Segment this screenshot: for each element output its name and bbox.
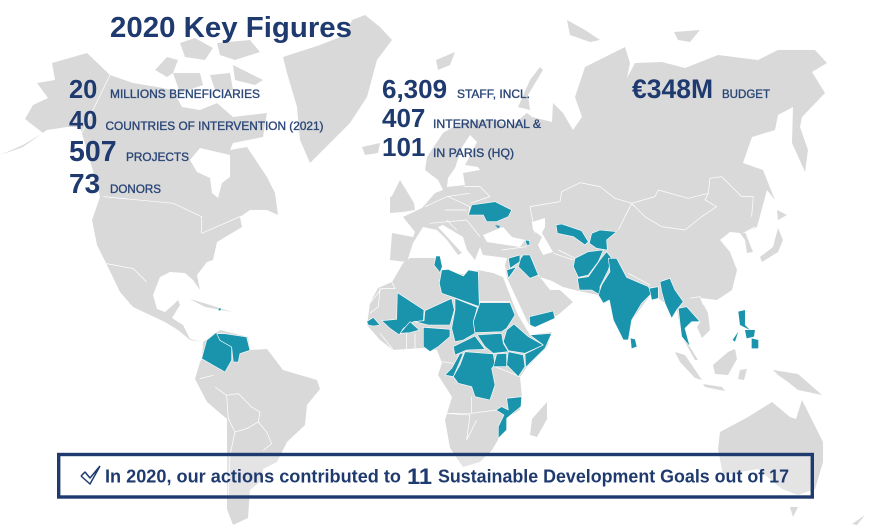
callout: sustainable development goals: Sustainable Development Goals out of 17 <box>438 467 789 487</box>
key figures: left column <box>69 76 324 199</box>
figure: projects: PROJECTS <box>126 150 189 164</box>
Colombia, Venezuela, Haiti <box>202 308 250 372</box>
highlighted countries <box>202 202 758 438</box>
country borders <box>80 75 755 495</box>
figure: projects <box>69 136 189 168</box>
title: 2020 Key Figures <box>110 12 352 44</box>
figure: budget <box>632 74 771 104</box>
figure: Paris staff: 101 <box>382 132 425 162</box>
figure: beneficiaries <box>69 76 260 104</box>
figure: countries: 40 <box>69 107 97 135</box>
figure: staff <box>382 74 530 104</box>
key figures: staff column <box>382 74 541 162</box>
figure: beneficiaries: 20 <box>69 76 97 104</box>
Ukraine <box>468 202 512 228</box>
callout: sustainable development goals <box>59 454 812 497</box>
Africa and Levant <box>367 255 555 438</box>
figure: countries: COUNTRIES OF INTERVENTION (2021) <box>106 119 324 133</box>
figure: Paris staff <box>382 132 514 162</box>
callout: sustainable development goals: 11 <box>407 464 432 489</box>
figure: donors: DONORS <box>110 182 161 196</box>
figure: projects: 507 <box>69 136 117 168</box>
figure: donors <box>69 168 161 199</box>
figure: staff: 6,309 <box>382 74 447 104</box>
figure: staff: STAFF, INCL. <box>457 87 530 101</box>
figure: budget: €348M <box>632 74 713 104</box>
figure: Paris staff: IN PARIS (HQ) <box>433 146 514 160</box>
Central and South Asia, Southeast Asia <box>525 224 758 348</box>
figure: international staff <box>382 103 541 133</box>
figure: beneficiaries: MILLIONS BENEFICIARIES <box>110 87 260 101</box>
figure: international staff: 407 <box>382 103 425 133</box>
icon: check mark <box>81 466 100 484</box>
inland seas <box>190 135 553 255</box>
figure: international staff: INTERNATIONAL & <box>433 117 541 131</box>
figure: budget: BUDGET <box>722 87 771 101</box>
figure: countries <box>69 107 324 135</box>
figure: donors: 73 <box>69 168 100 199</box>
callout: sustainable development goals: In 2020, our actions contributed to <box>105 467 401 487</box>
